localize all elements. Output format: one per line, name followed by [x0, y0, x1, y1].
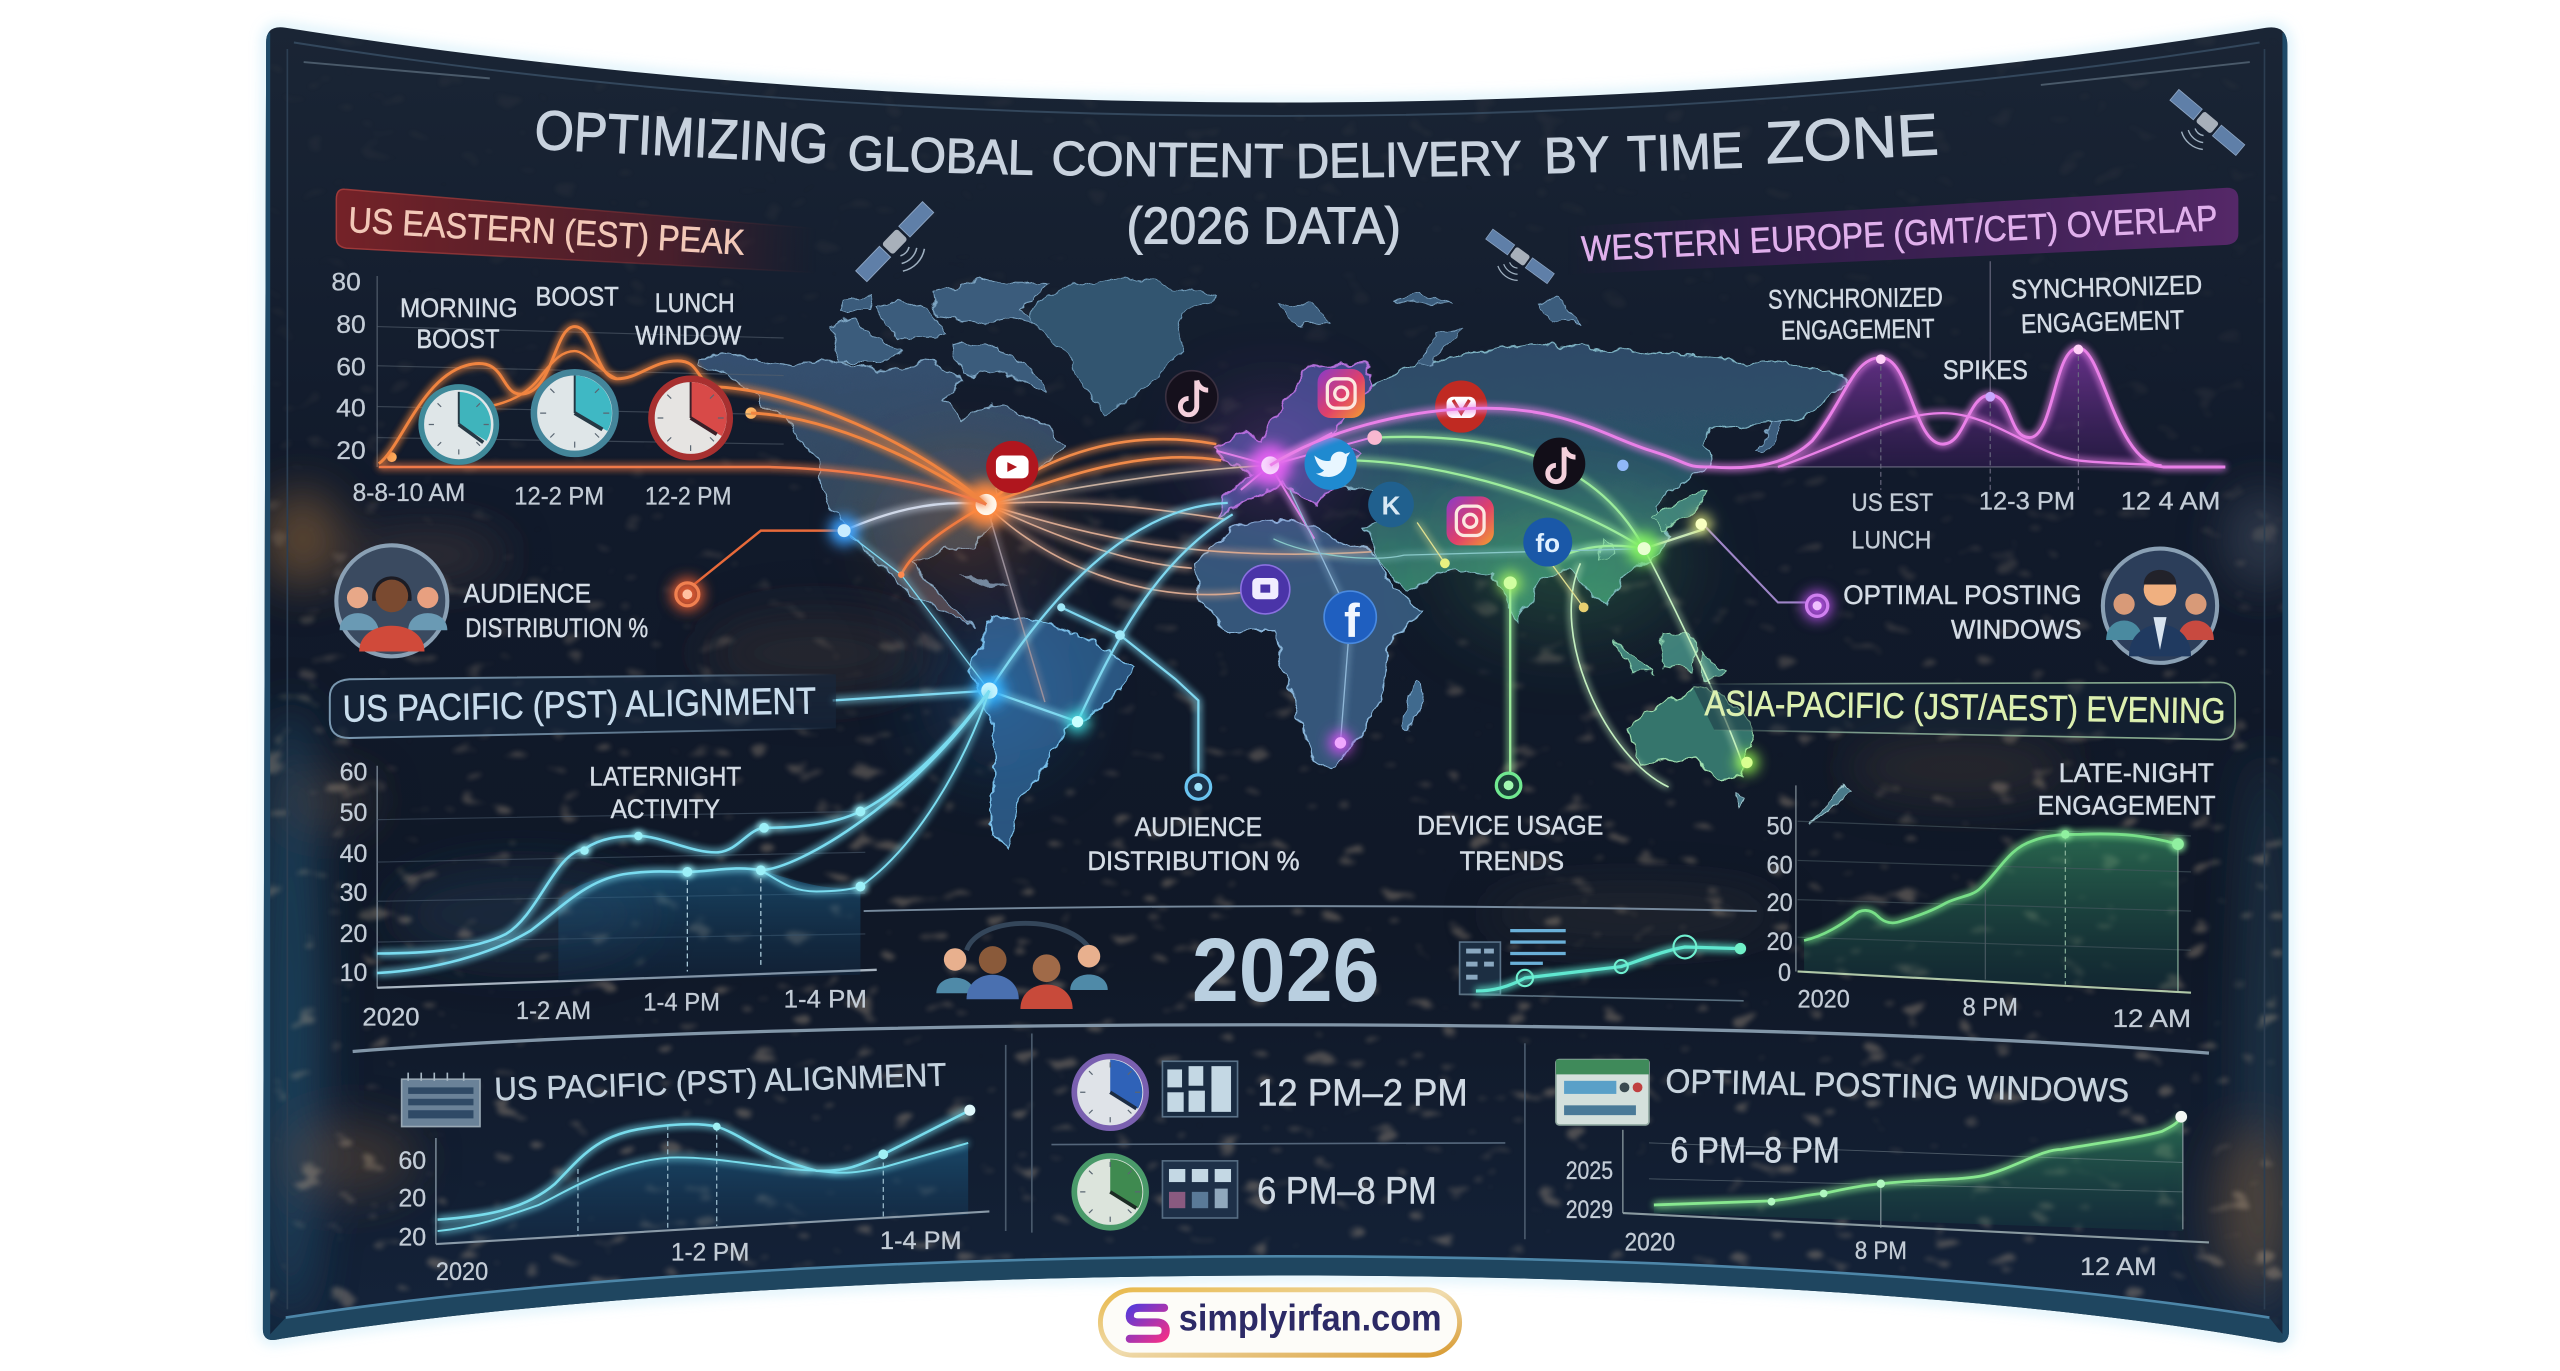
title: DELIVERY [1296, 132, 1522, 189]
title: OPTIMIZING [533, 99, 830, 175]
mini chart: device trend [1460, 929, 1746, 1001]
connector to audience distribution [694, 531, 844, 585]
annotation [589, 761, 741, 824]
annotation: LATERNIGHT [589, 761, 741, 791]
panel: US Pacific chart [340, 691, 989, 1031]
text: DEVICE USAGE [1417, 810, 1603, 840]
time window one: 12 PM–2 PM [1257, 1071, 1468, 1113]
axis labels: 2020 [1624, 1229, 1675, 1257]
icon: clock green [1074, 1156, 1146, 1228]
icon: clock blue [1074, 1056, 1146, 1128]
text [1087, 812, 1300, 876]
icon: purple chat badge [1241, 565, 1290, 614]
y axis labels: 40 [336, 394, 366, 422]
continent: Asia [1332, 343, 1850, 622]
text: AUDIENCE [464, 578, 591, 608]
text [1417, 810, 1603, 876]
continent: North America [700, 354, 1068, 629]
icon: Facebook: f [1344, 595, 1360, 648]
icon: clock teal one [421, 387, 496, 462]
subtitle: (2026 DATA) [1127, 197, 1401, 255]
y axis labels [331, 269, 366, 465]
continent: northern Russian islands [1275, 294, 1784, 451]
x axis labels: 12 4 AM [2121, 487, 2220, 515]
panel: bottom optimal posting windows [1556, 1060, 2209, 1281]
chart annotations: WINDOW [635, 321, 742, 351]
chart annotations [400, 281, 742, 354]
line chart: PST curves [377, 691, 989, 973]
icon: satellite middle [1475, 229, 1554, 299]
icon: dashboard one [1162, 1061, 1238, 1117]
callout: device usage trends [1417, 773, 1603, 876]
panel: US Eastern peak [331, 189, 986, 511]
y axis labels: 20 [1767, 889, 1793, 917]
continent: New Zealand [1736, 784, 1853, 821]
x axis labels: 2020 [1798, 985, 1850, 1013]
panel: Western Europe overlap [1270, 188, 2238, 555]
icon: posting team avatars [2103, 549, 2217, 663]
y axis labels: 0 [1778, 959, 1791, 987]
x axis labels: 1-2 AM [516, 997, 591, 1025]
x axis labels: LUNCH [1851, 527, 1931, 555]
icon: satellite left [856, 202, 950, 298]
title: CONTENT [1051, 132, 1284, 189]
text: DISTRIBUTION % [465, 613, 648, 643]
chart axis [1711, 261, 2225, 490]
network routes: green arcs into Asia [1273, 437, 1744, 787]
icon: Facebook [1324, 591, 1376, 648]
annotations: ENGAGEMENT [1781, 313, 1935, 346]
line chart: EST orange [379, 327, 986, 505]
icon: Instagram Asia [1447, 496, 1494, 545]
x axis labels: 8 PM [1962, 994, 2018, 1022]
annotations: SYNCHRONIZED [1768, 282, 1943, 315]
chart annotations: MORNING [400, 293, 518, 323]
panel: curved dashboard screen [261, 16, 2297, 1355]
icon: blue network badge [1368, 482, 1414, 527]
line chart: pink curve [1270, 348, 2225, 468]
text: DISTRIBUTION % [1087, 846, 1300, 876]
icon: TikTok north Atlantic [1166, 371, 1218, 423]
horizontal dividers [864, 906, 1757, 911]
area fill [558, 868, 860, 981]
watermark: simplyirfan.com [1100, 1290, 1460, 1355]
icon: S logo [1130, 1308, 1166, 1339]
icon: TikTok Asia [1533, 438, 1585, 490]
x axis labels: 12-2 PM [645, 483, 731, 511]
y axis labels: 10 [340, 959, 367, 987]
node [1496, 773, 1521, 798]
continent: South America [970, 617, 1135, 851]
network routes: orange arcs from US East [844, 439, 1371, 702]
icon: blue fo badge: fo [1535, 528, 1560, 558]
continent: Japan and Southeast Asian islands [1600, 491, 1724, 679]
continent: Cuba and Caribbean [960, 575, 1009, 586]
guide lines [687, 870, 761, 971]
panel: recommended times [1051, 1056, 1505, 1228]
data points [1768, 1111, 2187, 1206]
axis labels: 20 [398, 1185, 426, 1213]
chart grid and axes [1796, 785, 2191, 993]
annotations: ENGAGEMENT [2021, 305, 2185, 339]
callout: audience distribution centre [1087, 775, 1300, 876]
axis labels: 2029 [1566, 1196, 1613, 1224]
icon: group of people [936, 923, 1108, 1009]
icon: YouTube [986, 441, 1038, 493]
y axis labels [1767, 812, 1793, 987]
continent: Africa [1195, 519, 1422, 767]
annotation: LATE-NIGHT [2059, 758, 2214, 788]
text: WINDOWS [1951, 614, 2082, 644]
icon: Twitter [1304, 438, 1357, 490]
axis labels: 2020 [436, 1258, 488, 1286]
y axis labels: 20 [1767, 928, 1793, 956]
y axis labels: 20 [340, 920, 367, 948]
panel: bottom US Pacific [398, 1055, 989, 1286]
x axis labels [1798, 985, 2191, 1033]
axis labels: 12 AM [2080, 1253, 2157, 1281]
text [1843, 580, 2082, 644]
x axis labels [353, 479, 731, 511]
network hubs and nodes [387, 407, 1758, 774]
title [533, 99, 1940, 189]
x axis labels [362, 985, 867, 1031]
y axis labels: 80 [331, 269, 361, 297]
icon: dashboard two [1162, 1161, 1238, 1218]
watermark: simplyirfan.com: simplyirfan.com [1179, 1298, 1442, 1339]
axis labels: 1-4 PM [880, 1227, 962, 1255]
annotation: ENGAGEMENT [2038, 791, 2216, 821]
annotations [1768, 270, 2203, 385]
icon: clock red [651, 379, 730, 457]
connector to optimal posting windows [1704, 526, 1806, 602]
y axis labels: 50 [340, 799, 367, 827]
line chart: posting trend [1654, 1117, 2181, 1205]
area fill [1804, 834, 2178, 989]
text [464, 578, 648, 643]
icon: green calendar [1556, 1060, 1649, 1125]
y axis labels: 60 [340, 758, 367, 786]
title: ZONE [1764, 102, 1940, 176]
axes [436, 1125, 989, 1244]
heading: OPTIMAL POSTING WINDOWS [1665, 1063, 2129, 1110]
x axis labels: 8-8-10 AM [353, 479, 465, 507]
node [671, 578, 704, 611]
big year: 2026 [1192, 921, 1380, 1021]
node [1186, 775, 1211, 799]
line chart: bottom PST [438, 1110, 970, 1231]
axis labels: 60 [398, 1147, 426, 1175]
axis labels [1566, 1157, 2157, 1281]
x axis labels [1851, 487, 2220, 555]
header: Western Europe: WESTERN EUROPE (GMT/CET) OVERLAP [1580, 197, 2218, 269]
area fill [438, 1143, 968, 1244]
text: TRENDS [1460, 846, 1564, 876]
icon: satellite top right [2157, 90, 2245, 171]
chart annotations: LUNCH [655, 288, 735, 318]
y axis labels: 50 [1767, 812, 1793, 840]
y axis labels: 40 [340, 840, 367, 868]
icon: blue fo badge [1523, 518, 1572, 567]
data points [2061, 830, 2184, 850]
text: OPTIMAL POSTING [1843, 580, 2082, 610]
axis labels: 1-2 PM [671, 1238, 749, 1266]
heading: US PACIFIC (PST) ALIGNMENT [494, 1055, 947, 1107]
icon: blue network badge: K [1382, 490, 1401, 520]
chart grid and axes [377, 276, 784, 467]
x axis labels: US EST [1851, 489, 1933, 517]
chart annotations: BOOST [416, 324, 500, 354]
header: US Eastern: US EASTERN (EST) PEAK [347, 199, 746, 263]
x axis labels: 12 AM [2113, 1005, 2191, 1033]
network routes: blue arcs from South America [833, 503, 1233, 774]
title: GLOBAL [847, 127, 1035, 186]
area chart: purple spikes [1778, 348, 2163, 467]
y axis labels: 60 [1767, 851, 1793, 879]
x axis labels: 2020 [362, 1003, 420, 1031]
annotation [2038, 758, 2216, 821]
header: US Pacific: US PACIFIC (PST) ALIGNMENT [342, 679, 816, 730]
annotation: ACTIVITY [611, 794, 720, 824]
continent: Europe [1216, 364, 1373, 519]
data points [713, 1105, 975, 1159]
y axis labels [340, 758, 367, 987]
icon: Instagram Europe [1318, 369, 1365, 418]
outer glow of the curved display [263, 27, 2289, 1343]
x axis labels: 12-3 PM [1979, 487, 2075, 515]
vertical dividers [1006, 1034, 1525, 1239]
annotations: SYNCHRONIZED [2011, 270, 2203, 305]
y axis labels: 20 [336, 437, 366, 465]
x axis labels: 1-4 PM [784, 985, 867, 1013]
annotations: SPIKES [1943, 355, 2028, 385]
panel: Asia-Pacific chart [1767, 758, 2216, 1033]
time window: 6 PM–8 PM [1670, 1129, 1840, 1170]
axis labels: 8 PM [1855, 1237, 1907, 1265]
title: TIME [1626, 121, 1744, 182]
continent: Greenland [1030, 278, 1216, 416]
area fill [1654, 1120, 2183, 1231]
callout: optimal posting windows [1802, 549, 2217, 663]
y axis labels: 30 [340, 879, 367, 907]
spike peak dots [1876, 345, 2083, 402]
callout: audience distribution left [336, 545, 704, 656]
y axis labels: 60 [336, 354, 366, 382]
continent: Madagascar [1400, 682, 1425, 732]
node [1802, 591, 1832, 620]
icon: Vimeo badge [1435, 380, 1487, 433]
text: AUDIENCE [1135, 812, 1262, 842]
regional glow over the map [890, 408, 1682, 753]
axis labels: 2025 [1566, 1157, 1613, 1185]
time window two: 6 PM–8 PM [1257, 1169, 1437, 1211]
x axis labels: 1-4 PM [643, 989, 720, 1017]
axis labels: 20 [398, 1224, 426, 1252]
world map [700, 278, 1853, 851]
icon: clock teal two [534, 372, 616, 454]
icon: calendar [402, 1073, 480, 1127]
x axis labels: 12-2 PM [514, 483, 604, 511]
line chart: green curve [1804, 834, 2178, 940]
icon: audience avatars [336, 545, 447, 656]
continent: Arctic islands [829, 281, 1050, 392]
continent: Australia [1628, 686, 1753, 779]
axis labels [398, 1147, 962, 1286]
chart annotations: BOOST [536, 281, 619, 311]
chart grid and axes [377, 766, 877, 988]
data points [580, 807, 865, 891]
y axis labels: 80 [336, 311, 366, 339]
title: BY [1543, 125, 1610, 184]
Europe route fan [1216, 433, 1371, 743]
header: Asia-Pacific: ASIA-PACIFIC (JST/AEST) EVENING [1704, 682, 2226, 731]
axes [1623, 1117, 2209, 1242]
